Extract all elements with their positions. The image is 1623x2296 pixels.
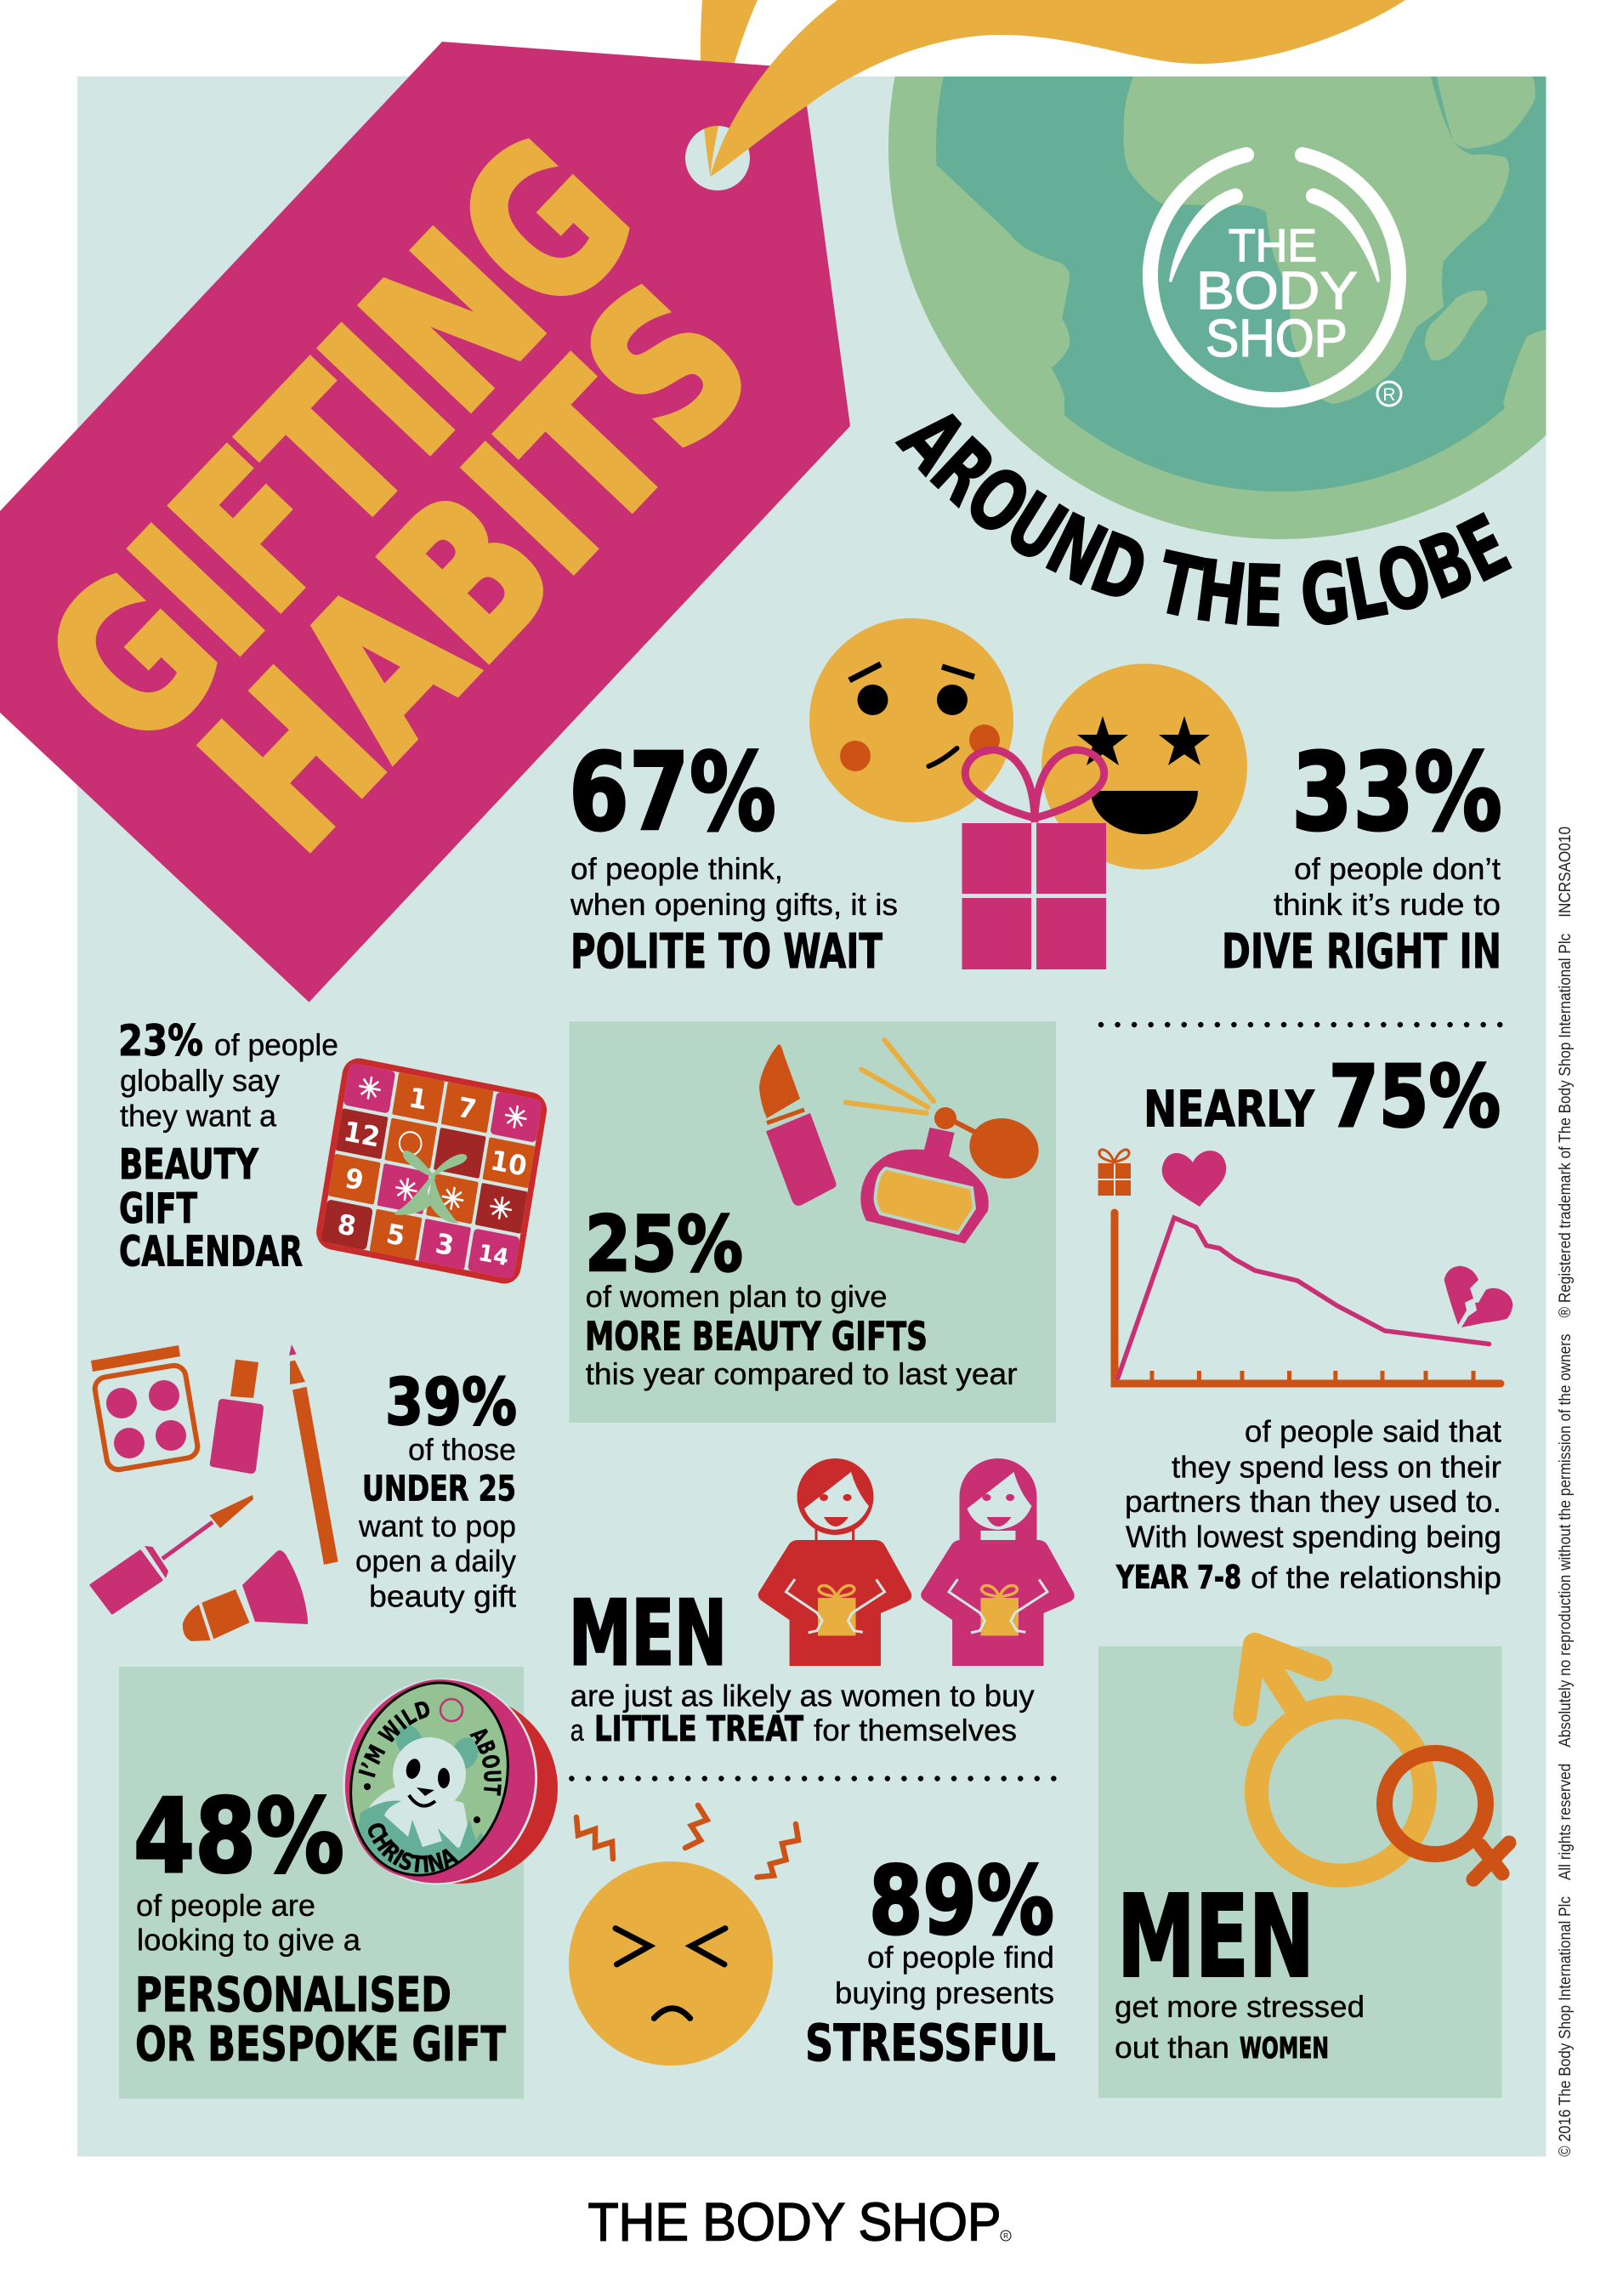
- gift tag: [0, 42, 850, 1002]
- stat: 39% under 25: UNDER 25: [362, 1469, 516, 1509]
- heading: around the globe: AROUND THE GLOBE: [894, 413, 1512, 627]
- icon: advent calendar: [314, 1055, 549, 1287]
- panel: men more stressed: out than: [1115, 2030, 1229, 2065]
- title: gifting habits: HABITS: [162, 243, 795, 892]
- footer logo: R: [1003, 2232, 1008, 2240]
- icon: advent calendar: 14: [476, 1240, 510, 1271]
- stat: 23% beauty gift calendar: GIFT: [119, 1185, 197, 1233]
- divider: dotted line center: [571, 1776, 1054, 1782]
- stat: 39% under 25: 39%: [385, 1364, 517, 1440]
- icon: personalised tin: ABOUT: [469, 1728, 502, 1796]
- stat: 23% beauty gift calendar: [118, 1016, 338, 1276]
- icon: mascara wand: [91, 1495, 253, 1613]
- panel: 48% personalised: [119, 1667, 524, 2099]
- stat: 39% under 25: open a daily: [355, 1543, 516, 1578]
- icon: stressed emoji: [569, 1805, 798, 2066]
- logo: the body shop roundel: BODY: [1196, 262, 1358, 321]
- stat: 67%: [569, 730, 898, 980]
- icon: advent calendar: 7: [456, 1092, 479, 1126]
- panel: 25% more beauty gifts: MORE BEAUTY GIFTS: [585, 1314, 928, 1360]
- stat: 67%: when opening gifts, it is: [570, 887, 898, 922]
- icon: personalised tin: CHRISTINA: [368, 1823, 459, 1873]
- stat: 89% stressful: buying presents: [835, 1975, 1054, 2010]
- stat: 23% beauty gift calendar: of people: [214, 1027, 338, 1062]
- panel: 48% personalised: PERSONALISED: [135, 1968, 451, 2023]
- stat: 39% under 25: [355, 1364, 517, 1614]
- stat: 67%: 67%: [569, 730, 776, 855]
- ribbon behind tag: [701, 0, 758, 177]
- stat: nearly 75%: [1143, 1047, 1501, 1146]
- stat: 23% beauty gift calendar: they want a: [120, 1099, 277, 1133]
- text: spending description: YEAR 7-8: [1115, 1560, 1241, 1596]
- icon: advent calendar: 9: [343, 1162, 366, 1197]
- text: spending description: With lowest spending being: [1126, 1520, 1501, 1554]
- icon: advent calendar: 8: [335, 1208, 358, 1243]
- icon: small gift: [1098, 1150, 1131, 1196]
- stat: men little treat: LITTLE TREAT: [594, 1708, 803, 1749]
- icon: female symbol: [1384, 1753, 1509, 1879]
- panel: 48% personalised: 48%: [133, 1778, 344, 1896]
- divider: dotted line top right: [1101, 1022, 1501, 1027]
- panel: men more stressed: WOMEN: [1240, 2032, 1329, 2066]
- trend line: [1118, 1218, 1490, 1378]
- stat: nearly 75%: 75%: [1329, 1047, 1501, 1146]
- stat: 89% stressful: of people find: [867, 1940, 1054, 1975]
- stat: men little treat: a: [570, 1713, 584, 1748]
- icon: worried emoji: [809, 618, 1013, 822]
- stat: 89% stressful: 89%: [869, 1847, 1054, 1956]
- icon: advent calendar: 1: [406, 1083, 429, 1117]
- icon: woman holding gift: [921, 1458, 1075, 1666]
- logo: the body shop roundel: R: [1382, 385, 1396, 405]
- stat: men little treat: MEN: [569, 1582, 727, 1685]
- stat: men little treat: [569, 1582, 1035, 1749]
- chart axes: [1152, 1371, 1473, 1384]
- text: spending description: of people said that: [1245, 1413, 1501, 1448]
- panel: men more stressed: [1098, 1645, 1509, 2098]
- stat: 67%: of people think,: [570, 851, 783, 886]
- icon: heart: [1162, 1151, 1226, 1207]
- stat: men little treat: for themselves: [814, 1713, 1017, 1748]
- chart: relationship spending over time: [1098, 1150, 1512, 1384]
- icon: makeup palette: [91, 1345, 199, 1471]
- stat: 33%: of people don’t: [1294, 851, 1501, 886]
- panel: 25% more beauty gifts: [570, 1021, 1056, 1423]
- panel: 25% more beauty gifts: of women plan to give: [586, 1279, 888, 1314]
- stat: nearly 75%: NEARLY: [1143, 1080, 1315, 1138]
- icon: advent calendar: 5: [384, 1219, 407, 1253]
- stat: 33%: DIVE RIGHT IN: [1222, 924, 1501, 980]
- text: spending description: they spend less on their: [1172, 1449, 1501, 1484]
- panel: 25% more beauty gifts: this year compared to last year: [586, 1356, 1018, 1391]
- icon: advent calendar: 10: [488, 1145, 529, 1183]
- text: spending description: of the relationship: [1251, 1560, 1501, 1595]
- icon: advent calendar: 12: [341, 1116, 382, 1154]
- icon: perfume bottle: [846, 1040, 1046, 1243]
- stat: 33%: 33%: [1291, 730, 1502, 855]
- stat: 33%: [1222, 730, 1502, 980]
- globe: [888, 77, 1546, 539]
- text: spending description: partners than they used to.: [1125, 1484, 1501, 1519]
- logo: the body shop roundel: SHOP: [1206, 310, 1348, 368]
- icon: broken heart: [1444, 1266, 1512, 1327]
- icon: advent calendar: 3: [433, 1228, 456, 1263]
- panel: men more stressed: MEN: [1117, 1873, 1314, 2003]
- stat: 39% under 25: of those: [408, 1432, 516, 1467]
- stat: 23% beauty gift calendar: BEAUTY: [119, 1140, 258, 1189]
- icon: blush brush: [183, 1550, 308, 1641]
- icon: personalised tin: I’M WILD: [358, 1701, 429, 1777]
- icon: star-eyed emoji: [1041, 663, 1247, 869]
- panel: 48% personalised: OR BESPOKE GIFT: [135, 2017, 506, 2072]
- stat: 23% beauty gift calendar: globally say: [120, 1063, 280, 1098]
- panel: men more stressed: get more stressed: [1115, 1989, 1365, 2024]
- stat: 23% beauty gift calendar: CALENDAR: [119, 1228, 303, 1276]
- stat: 89% stressful: STRESSFUL: [805, 2014, 1056, 2073]
- stat: 89% stressful: [805, 1847, 1056, 2073]
- icon: gift box: [962, 750, 1106, 969]
- icon: nail polish: [210, 1360, 264, 1474]
- logo: the body shop roundel: [1150, 155, 1401, 406]
- icon: male symbol: [1245, 1645, 1425, 1876]
- stat: 39% under 25: beauty gift: [369, 1579, 516, 1614]
- panel: 48% personalised: of people are: [136, 1888, 315, 1923]
- logo: the body shop roundel: THE: [1229, 220, 1317, 271]
- footer logo: THE BODY SHOP: [588, 2193, 1002, 2253]
- stat: 23% beauty gift calendar: 23%: [118, 1016, 203, 1066]
- ribbon through tag: [711, 0, 1405, 177]
- icon: stress sparks: [576, 1805, 798, 1878]
- stat: 33%: think it’s rude to: [1274, 887, 1501, 922]
- panel: 25% more beauty gifts: 25%: [585, 1200, 743, 1289]
- icon: eye pencil: [289, 1344, 338, 1565]
- icon: man holding gift: [758, 1458, 911, 1666]
- stat: men little treat: are just as likely as women to buy: [570, 1679, 1035, 1713]
- stat: 67%: POLITE TO WAIT: [570, 924, 882, 980]
- icon: lipstick: [759, 1044, 837, 1206]
- icon: personalised tin: [343, 1679, 558, 1884]
- text: spending description: [1115, 1413, 1501, 1596]
- panel: 48% personalised: looking to give a: [137, 1923, 361, 1958]
- copyright line: © 2016 The Body Shop International Plc All rights reserved Absolutely no reproduction without the permission of the owners ® Registered trademark of The Body Shop International Plc INCRSAO010: [1557, 827, 1575, 2157]
- stat: 39% under 25: want to pop: [358, 1509, 516, 1543]
